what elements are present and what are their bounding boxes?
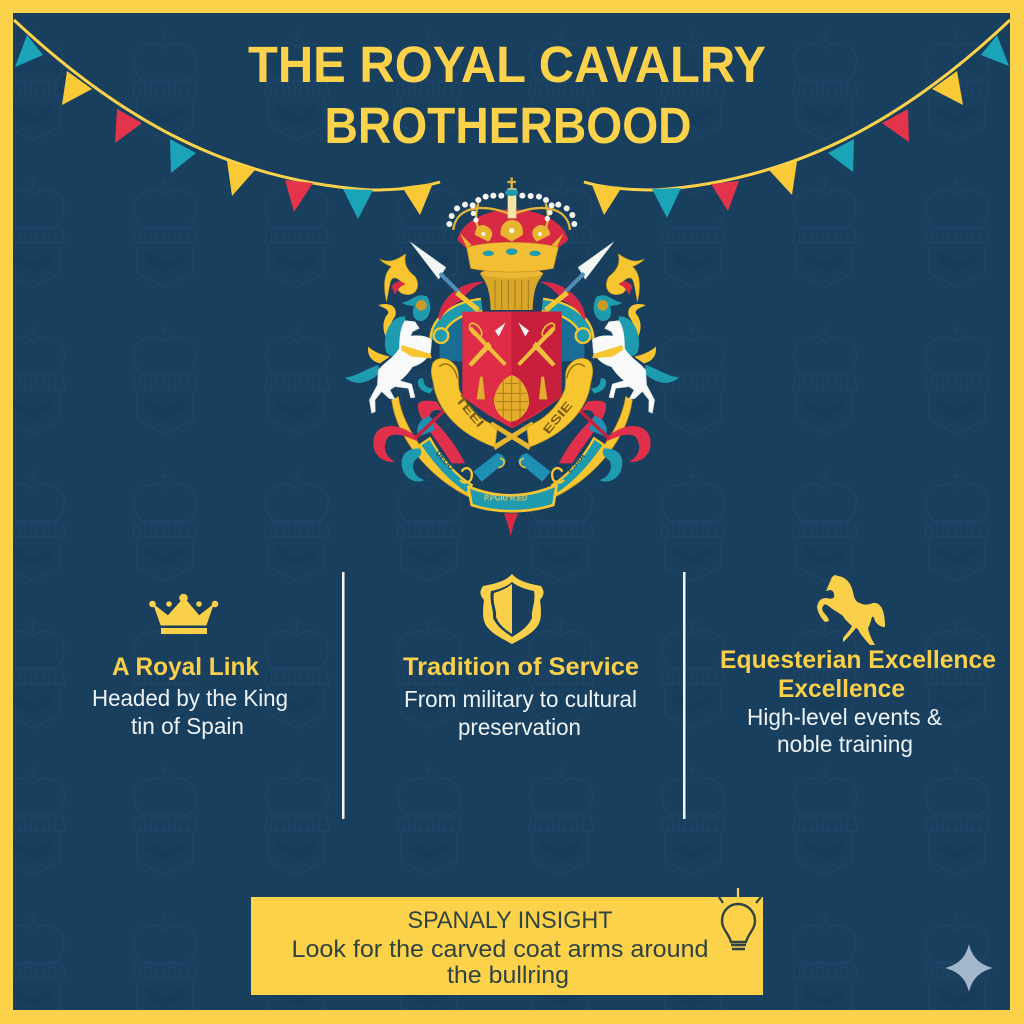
side scroll text: ESIIA: [565, 451, 587, 475]
callout text: SPANALY INSIGHT: [408, 907, 613, 934]
heading: A Royal Link: [112, 653, 259, 681]
heading: [720, 646, 996, 703]
title: THE ROYAL CAVALRY: [248, 36, 766, 93]
title: BROTHERBOOD: [324, 97, 692, 154]
description: [92, 685, 288, 739]
description: noble training: [777, 731, 913, 757]
heading: Tradition of Service: [403, 653, 639, 681]
description: preservation: [458, 714, 581, 740]
bunting: right string of flags: [584, 20, 1010, 218]
gold collar under the crown: [480, 268, 543, 310]
bunting: left string of flags: [14, 20, 440, 219]
motto scroll at the bottom: P.PGIU R.ED: [484, 494, 528, 503]
callout: insight box: [251, 888, 763, 995]
motto scroll at the bottom: [468, 485, 557, 536]
description: Headed by the King: [92, 685, 288, 711]
title: [248, 36, 766, 154]
column: equestrian excellence: [720, 646, 996, 757]
icon: light bulb: [719, 888, 761, 949]
description: From military to cultural: [404, 686, 637, 712]
ribbon text left: TEEI: [453, 393, 487, 430]
side scroll text: [434, 449, 587, 475]
side scroll text: UEOO: [434, 449, 456, 472]
shield right half: [512, 312, 562, 428]
column: a royal link: [92, 653, 288, 739]
icon: shield: [480, 574, 544, 644]
column: tradition of service: [403, 653, 639, 740]
royal crown: [446, 177, 577, 272]
callout text: the bullring: [447, 962, 569, 989]
icon: crown: [149, 594, 218, 634]
ribbon text right: ESIE: [540, 399, 575, 437]
description: High-level events &: [747, 704, 942, 730]
shield charges on right half: [517, 321, 557, 399]
heading: Excellence: [778, 675, 905, 703]
callout text: [292, 907, 708, 989]
description: [747, 704, 942, 757]
description: tin of Spain: [131, 713, 244, 739]
heading: Equesterian Excellence: [720, 646, 996, 674]
coat of arms: [345, 177, 679, 536]
icon: sparkle: [945, 944, 993, 992]
shield: golden beehive charge: [494, 375, 529, 422]
description: [404, 686, 637, 740]
divider: [683, 572, 686, 819]
icon: rearing horse: [817, 575, 885, 645]
divider: [342, 572, 344, 819]
callout text: Look for the carved coat arms around: [292, 936, 708, 963]
